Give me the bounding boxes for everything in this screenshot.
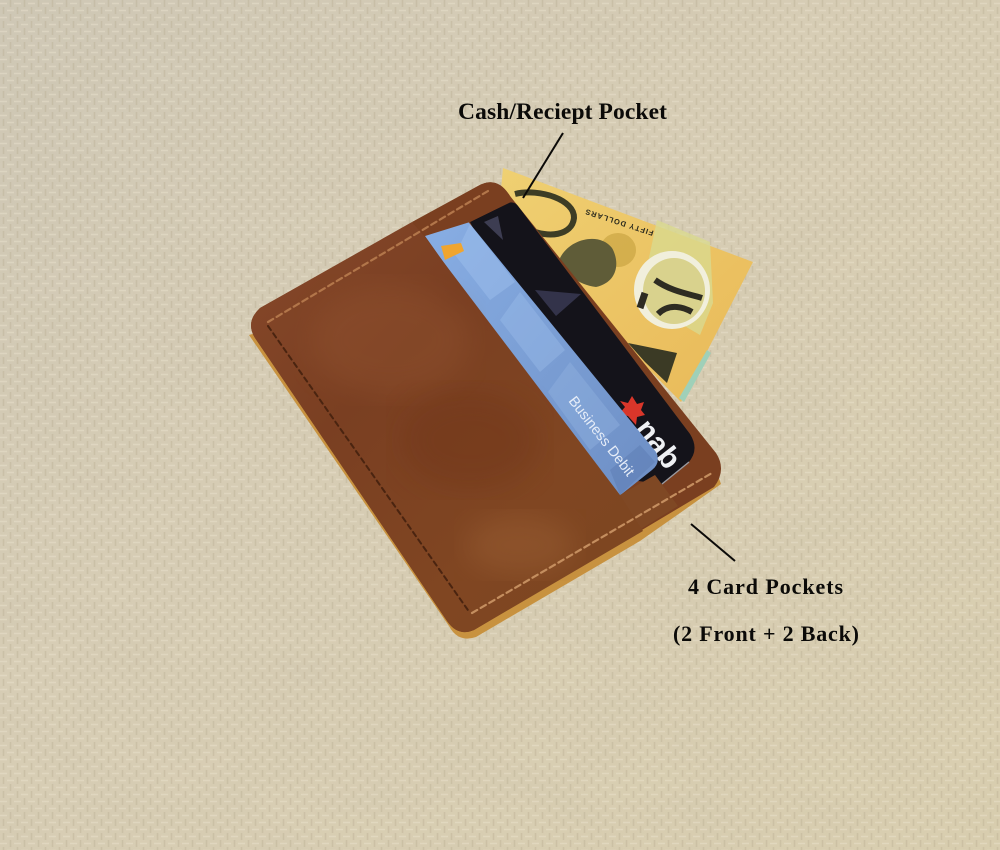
wallet: lower leather edge layers	[249, 320, 721, 639]
wallet: back leather panel	[251, 182, 721, 632]
banknote: folded fifty dollar note	[500, 168, 753, 402]
wallet: center slot tab	[620, 475, 678, 529]
card label: Business Debit	[565, 394, 637, 480]
callout line: card pockets	[691, 524, 735, 561]
nab wordmark: nab	[628, 413, 687, 475]
wallet: front pocket	[251, 182, 643, 632]
note numeral	[515, 192, 574, 234]
card: black nab card	[470, 202, 695, 484]
wallet: stitching	[268, 191, 712, 613]
note round seal	[600, 233, 636, 267]
label: two front plus two back: (2 Front + 2 Back)	[673, 621, 859, 646]
label: cash and receipt pocket: Cash/Reciept Pocket	[458, 99, 667, 125]
note dark print	[628, 343, 677, 383]
note portrait	[560, 239, 616, 287]
note clear window	[634, 251, 710, 329]
card orange logo	[441, 243, 464, 260]
label: four card pockets: 4 Card Pockets	[688, 574, 843, 599]
nab logo star	[619, 396, 645, 425]
callout line: cash pocket	[523, 133, 563, 198]
card: blue business debit card	[425, 215, 658, 497]
note text: FIFTY DOLLARS	[583, 207, 655, 238]
